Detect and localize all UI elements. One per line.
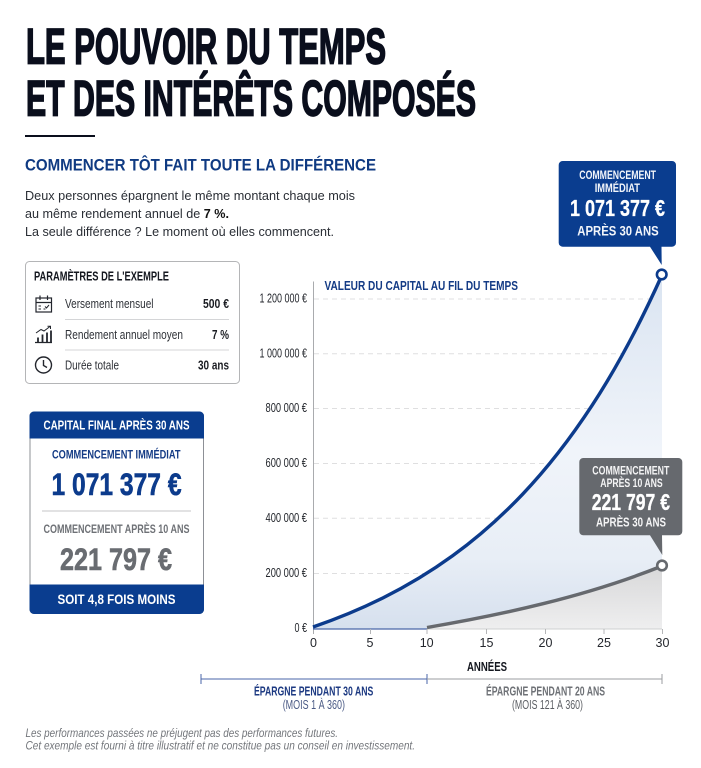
- marker: delayed start: [657, 561, 667, 570]
- row: rendement annuel moyen: Rendement annuel moyen: [65, 327, 183, 342]
- area: delayed start: [427, 566, 662, 628]
- callout: delayed start: APRÈS 10 ANS: [600, 475, 663, 490]
- disclaimer: Les performances passées ne préjugent pas des performances futures.: [26, 726, 338, 740]
- panel header: CAPITAL FINAL APRÈS 30 ANS: [44, 418, 190, 432]
- disclaimer: Cet exemple est fourni à titre illustratif et ne constitue pas un conseil en investissement.: [26, 738, 415, 752]
- row: durée totale: [65, 358, 229, 372]
- title: [26, 18, 476, 126]
- x axis: 20: [539, 636, 552, 650]
- y axis: 1 200 000 €: [260, 292, 307, 306]
- y axis: 200 000 €: [266, 566, 307, 580]
- icon: growth chart: [35, 326, 52, 342]
- callout: delayed start: [579, 458, 682, 555]
- timeline: épargne pendant 20 ans: [427, 674, 662, 712]
- disclaimer: [26, 726, 415, 752]
- panel footer: SOIT 4,8 FOIS MOINS: [58, 591, 176, 607]
- x axis: 5: [367, 636, 374, 650]
- timeline: épargne pendant 20 ans: (MOIS 121 À 360): [512, 697, 583, 712]
- icon: calendar: [36, 296, 52, 312]
- x axis title: ANNÉES: [467, 659, 507, 674]
- row: rendement annuel moyen: 7 %: [212, 327, 229, 342]
- panel footer: [30, 584, 204, 614]
- row: versement mensuel: 500 €: [203, 296, 229, 311]
- y axis: 400 000 €: [266, 511, 307, 525]
- y axis: 1 000 000 €: [260, 346, 307, 360]
- title: LE POUVOIR DU TEMPS: [26, 18, 386, 74]
- callout: immediate start: APRÈS 30 ANS: [577, 224, 659, 238]
- intro text: au même rendement annuel de 7 %.: [25, 206, 229, 221]
- panel header: [30, 412, 204, 438]
- callout: immediate start: IMMÉDIAT: [595, 180, 641, 195]
- x axis: 25: [597, 636, 611, 650]
- y axis: 600 000 €: [266, 456, 307, 470]
- callout: immediate start: 1 071 377 €: [570, 195, 665, 221]
- timeline: épargne pendant 20 ans: ÉPARGNE PENDANT 20 ANS: [486, 684, 605, 699]
- x axis: [310, 629, 669, 674]
- curve: immediate start: [313, 275, 662, 627]
- callout: delayed start: COMMENCEMENT: [592, 463, 670, 477]
- callout: delayed start: APRÈS 30 ANS: [596, 515, 666, 530]
- subtitle: COMMENCER TÔT FAIT TOUTE LA DIFFÉRENCE: [25, 156, 376, 174]
- panel: capital final: [30, 412, 204, 614]
- intro text: [25, 188, 355, 239]
- timeline: épargne pendant 30 ans: ÉPARGNE PENDANT 30 ANS: [254, 684, 373, 699]
- x axis: 15: [480, 636, 493, 650]
- x axis: 0: [310, 636, 317, 650]
- timeline: épargne pendant 30 ans: [201, 674, 427, 712]
- row: durée totale: 30 ans: [198, 358, 229, 372]
- timeline: épargne pendant 30 ans: (MOIS 1 À 360): [283, 697, 345, 712]
- callout: delayed start: 221 797 €: [592, 489, 670, 515]
- x axis: 30: [656, 636, 669, 650]
- area: immediate start: [313, 275, 662, 628]
- chart title: VALEUR DU CAPITAL AU FIL DU TEMPS: [324, 278, 518, 293]
- panel: paramètres de l'exemple: [26, 262, 240, 384]
- row: versement mensuel: Versement mensuel: [65, 296, 154, 311]
- delayed start label: COMMENCEMENT APRÈS 10 ANS: [44, 521, 190, 536]
- marker: immediate start: [657, 270, 666, 279]
- y axis: 0 €: [294, 621, 307, 635]
- row: durée totale: Durée totale: [65, 358, 119, 372]
- y axis: 800 000 €: [266, 401, 307, 415]
- line chart: valeur du capital: [260, 270, 669, 674]
- intro text: Deux personnes épargnent le même montant chaque mois: [25, 188, 355, 203]
- delayed start value: 221 797 €: [60, 541, 172, 577]
- curve: delayed start: [427, 566, 662, 628]
- icon: clock: [36, 357, 52, 373]
- callout: immediate start: [559, 161, 676, 265]
- immediate start label: COMMENCEMENT IMMÉDIAT: [52, 446, 181, 462]
- y axis: [260, 282, 314, 635]
- callout: immediate start: COMMENCEMENT: [579, 168, 656, 182]
- x axis: 10: [420, 636, 434, 650]
- intro text: La seule différence ? Le moment où elles commencent.: [25, 224, 334, 239]
- immediate start value: 1 071 377 €: [52, 466, 182, 502]
- panel heading: PARAMÈTRES DE L'EXEMPLE: [34, 268, 169, 284]
